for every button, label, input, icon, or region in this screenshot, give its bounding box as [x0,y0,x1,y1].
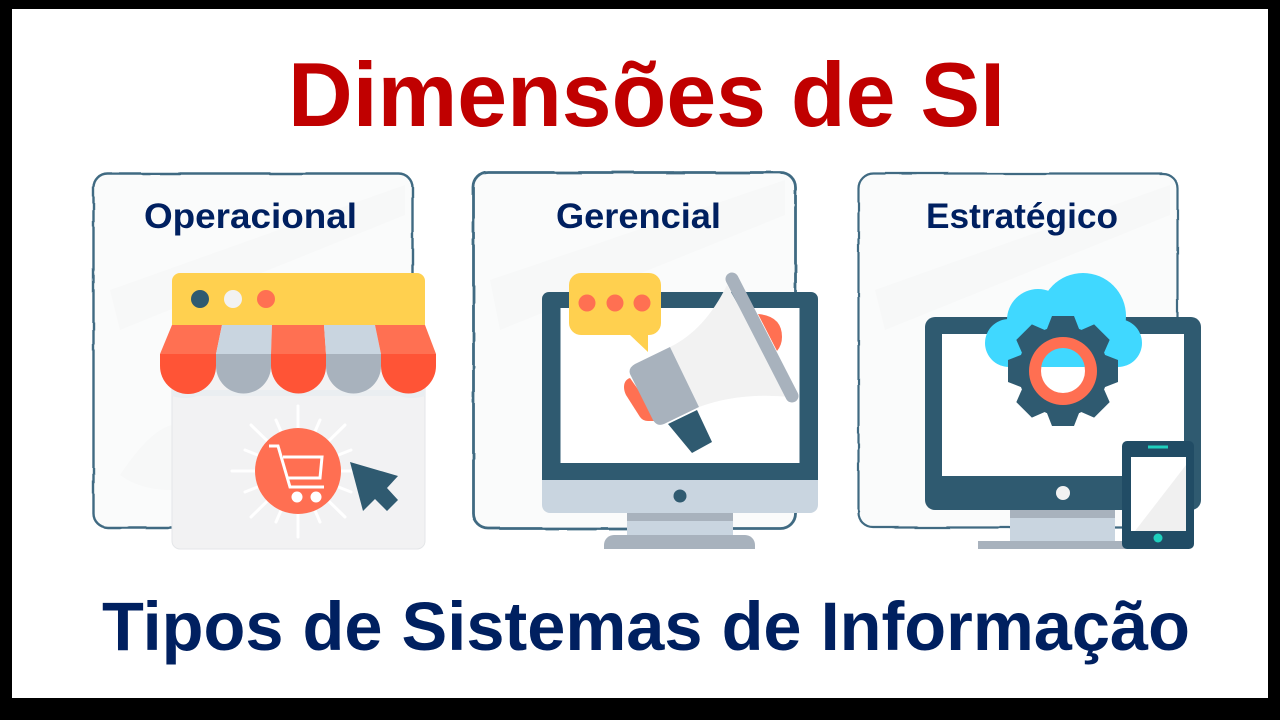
heading: Gerencial: Gerencial [556,196,721,236]
panel frame: Estratégico [858,174,1178,528]
heading: Estratégico: Estratégico [926,196,1118,236]
icon: gear [1008,316,1118,426]
icon: speech bubble [569,273,661,352]
panel: Operacional [94,174,436,549]
icon: cloud [985,273,1142,367]
icon: desktop monitor [925,317,1201,549]
icon: sun rays [232,406,364,537]
panel: Estratégico [858,174,1201,549]
panel: Gerencial [474,172,818,549]
panel frame: Operacional [94,174,412,528]
icon: shopping cart [255,428,341,514]
icon: mouse cursor [350,462,398,511]
icon: desktop monitor [542,292,818,549]
icon: smartphone [1122,441,1194,549]
icon: megaphone [624,279,792,453]
panel frame: Gerencial [474,172,796,528]
title: Dimensões de SI [288,45,1005,146]
heading: Operacional: Operacional [144,196,357,236]
icon: online shop [160,273,436,549]
subtitle: Tipos de Sistemas de Informação [102,588,1190,665]
